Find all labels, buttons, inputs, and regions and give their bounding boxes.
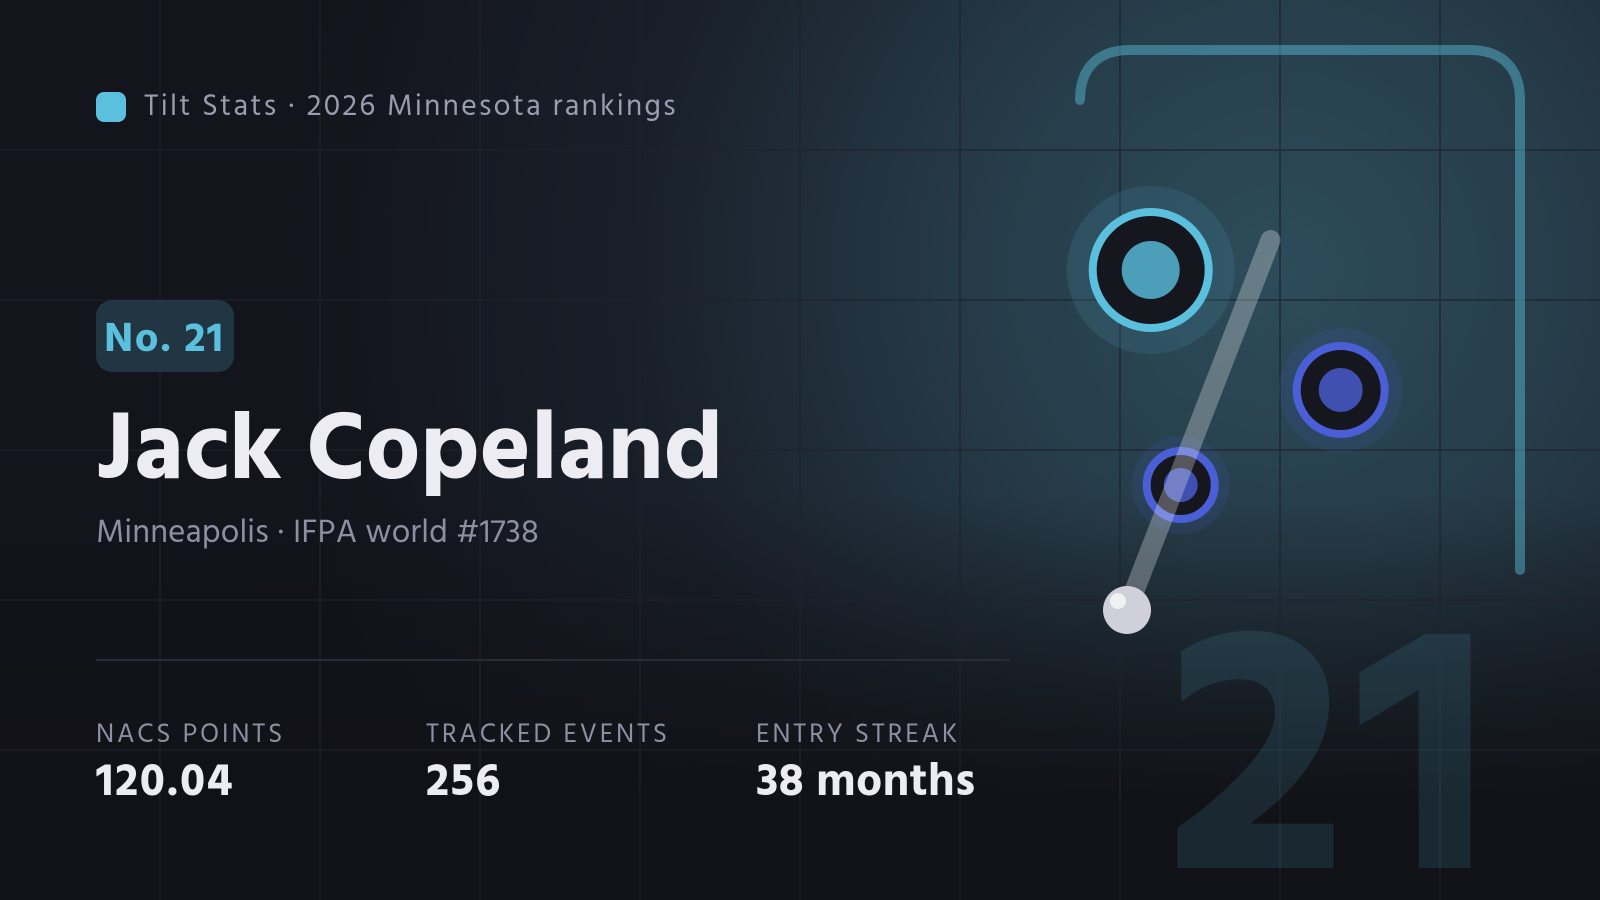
eyebrow text: Tilt Stats · 2026 Minnesota rankings	[144, 84, 678, 132]
flipper line	[1127, 240, 1270, 610]
stat: NACS points	[96, 714, 285, 820]
stat: tracked events: 256	[426, 746, 502, 820]
bumper: medium blue	[1279, 328, 1403, 452]
location and world rank: Minneapolis · IFPA world #1738	[96, 508, 539, 561]
brand mark	[96, 92, 126, 122]
stat: entry streak	[756, 714, 976, 820]
bumper: small blue	[1132, 436, 1230, 534]
player name: Jack Copeland	[96, 376, 723, 531]
pinball	[1103, 586, 1151, 634]
bumper: large cyan	[1067, 186, 1235, 354]
stat: entry streak: ENTRY STREAK	[756, 714, 960, 756]
playfield rail	[1080, 50, 1520, 570]
stat: tracked events	[426, 714, 670, 820]
stat: tracked events: TRACKED EVENTS	[426, 714, 670, 756]
stat: entry streak: 38 months	[756, 746, 976, 820]
stat: NACS points: 120.04	[96, 746, 234, 820]
divider	[96, 659, 1010, 661]
rank badge: No. 21	[104, 307, 224, 372]
stat: NACS points: NACS POINTS	[96, 714, 285, 756]
